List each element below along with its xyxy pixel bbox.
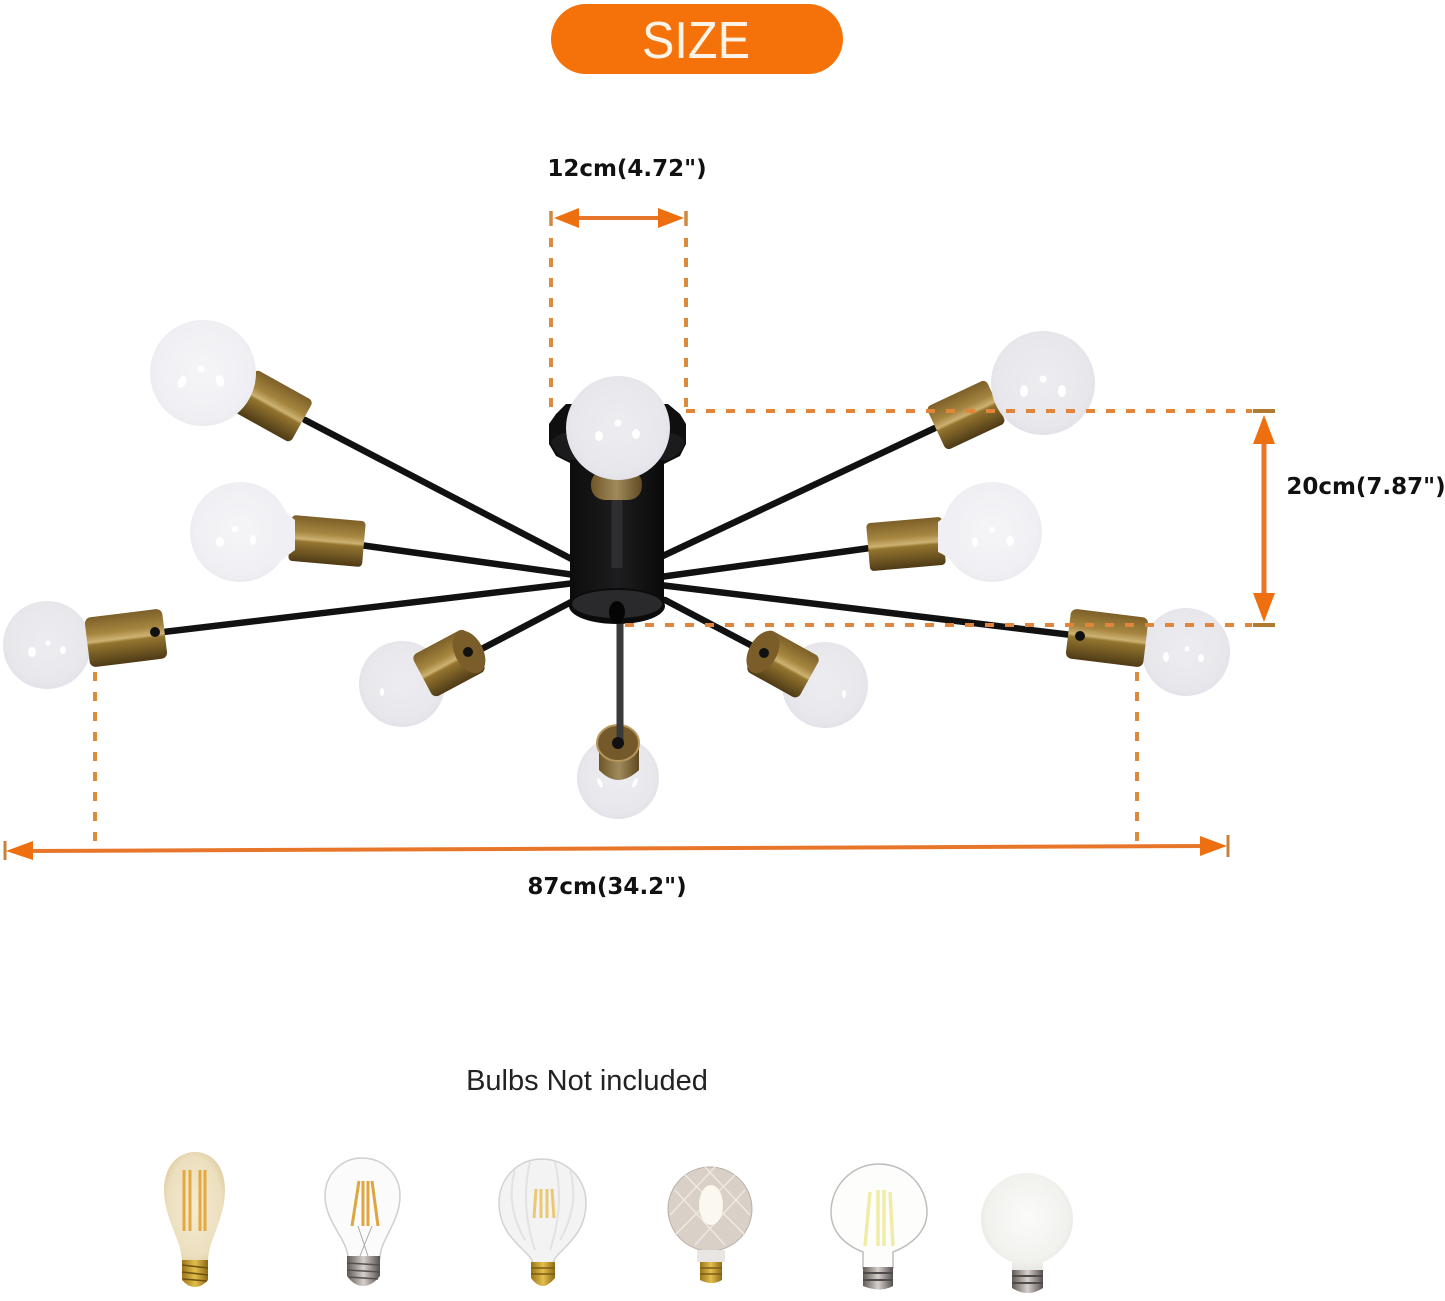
- right-middle lamp: [866, 482, 1042, 582]
- bulb option: crystal-cut globe: [668, 1167, 752, 1283]
- upper-left lamp: [150, 320, 313, 443]
- note: bulbs not included: Bulbs Not included: [466, 1065, 708, 1097]
- black rods: [155, 420, 1080, 655]
- title badge: SIZE: SIZE: [642, 12, 750, 70]
- bulb option: clear G25 filament: [831, 1164, 927, 1290]
- dimension: overall width 87cm: 87cm(34.2"): [527, 874, 687, 900]
- dimension: canopy width 12cm: 12cm(4.72"): [547, 156, 707, 182]
- dimension: overall width 87cm: [5, 672, 1228, 900]
- far-right lamp: [1065, 608, 1230, 696]
- bulb option: frosted globe: [981, 1173, 1073, 1293]
- dimension: canopy width 12cm: [547, 156, 707, 412]
- title badge: SIZE: [551, 4, 843, 74]
- bulb option: ribbed globe: [499, 1159, 586, 1286]
- bulb option: amber ST64 filament: [164, 1152, 225, 1287]
- top height guide line: [686, 409, 1252, 413]
- far-left lamp: [3, 601, 168, 689]
- lower-right lamp: [740, 625, 868, 728]
- dimension: height 20cm: 20cm(7.87"): [1286, 474, 1445, 500]
- dimension: height 20cm: [625, 411, 1445, 625]
- lower-left lamp: [359, 625, 492, 727]
- left-middle lamp: [190, 482, 366, 582]
- central canopy and hub: [549, 376, 686, 624]
- bottom lamp: [577, 622, 659, 819]
- bulb option: clear A60 filament: [325, 1158, 400, 1286]
- upper-right lamp: [926, 331, 1095, 451]
